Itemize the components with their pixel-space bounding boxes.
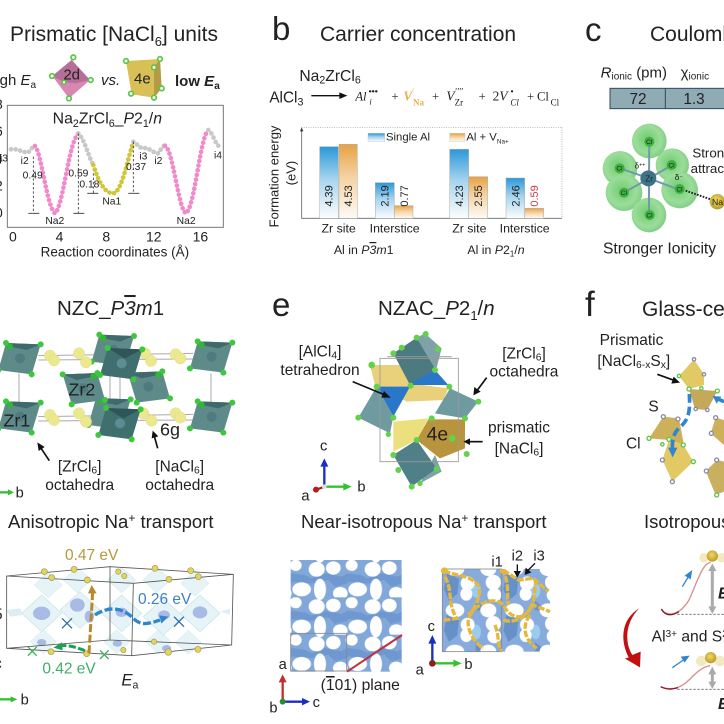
label: AlCl4 tetrahedron: tetrahedron: [280, 362, 360, 379]
defect equation: V: [446, 89, 456, 104]
defect equation: Na: [299, 68, 319, 85]
table: ionic radius and electronegativity: 72: [629, 91, 647, 108]
defect equation: 6: [355, 75, 361, 87]
label: prismatic NaCl6: prismatic: [488, 420, 550, 437]
arrow: green path: [53, 642, 85, 651]
defect equation: •: [511, 87, 514, 96]
defect equation: ′′′′: [455, 87, 464, 97]
bar chart: formation energy: Al in P3m1: [334, 243, 394, 257]
molecule: ZrCl6 octahedron with Na: Cl: [668, 162, 675, 169]
label: prismatic NaCl6-xSx: 6-x: [636, 360, 651, 371]
title: anisotropic transport: Anisotropic Na: [8, 511, 128, 532]
title: near-isotropic transport: Near-isotropous Na: [301, 511, 461, 532]
chart: energy profile: i2: [154, 156, 163, 167]
caption: stronger ionicity: Stronger Ionicity: [603, 241, 716, 258]
label: AlCl4 tetrahedron: [AlCl: [299, 344, 331, 361]
chart title: Na: [53, 111, 73, 128]
labels: Zr sites: Zr2: [68, 380, 95, 400]
arrow: blue migration path: [672, 394, 724, 450]
labels: S and Cl: Cl: [626, 436, 641, 453]
legend: [368, 132, 509, 145]
label: NaCl6 octahedra: ]: [200, 459, 204, 476]
panel f: glass-ceramic: [585, 285, 724, 497]
molecule: ZrCl6 octahedron with Na: ++: [639, 163, 645, 169]
defect equation: 3: [297, 96, 303, 108]
bar chart: formation energy: 4.23: [454, 185, 466, 207]
label: versus: vs.: [101, 72, 120, 89]
axes: c b a: b: [464, 657, 472, 673]
axes: c b a: c: [428, 619, 435, 635]
axes: a c b: b: [269, 700, 277, 716]
chart: energy profile: 0.18: [79, 179, 100, 190]
title: prismatic units: Prismatic [NaCl: [10, 23, 155, 46]
labels: i1 i2 i3 with arrows: i2: [512, 548, 523, 564]
molecule: ZrCl6 octahedron with Na: −: [679, 174, 683, 180]
chart title: ZrCl: [79, 111, 109, 128]
chart: energy profile: 0.37: [126, 162, 146, 173]
panel: anisotropic transport: [0, 511, 233, 708]
axes: a c b: [269, 657, 320, 716]
label: plane: (101) plane: [321, 677, 400, 694]
chart: energy profile: i4: [214, 150, 222, 161]
arrowheads: [668, 396, 721, 457]
chart title: 1: [143, 118, 149, 130]
title: NZAC P21/n: 1: [470, 308, 478, 323]
bar chart: formation energy: 1: [510, 249, 515, 258]
defect equation: +: [479, 90, 486, 104]
defect equation: ZrCl: [325, 68, 355, 85]
isosurface: [7, 567, 230, 654]
title: carrier concentration: Carrier concentration: [320, 23, 516, 46]
vacancy marks: [28, 617, 184, 659]
table: ionic radius and electronegativity: ionic: [611, 71, 632, 82]
icon: 2d octahedron: 2d: [63, 66, 80, 83]
panel letter b: b: [272, 10, 290, 47]
legend: Al + V: [466, 132, 497, 144]
arrow: blue path: [95, 609, 168, 624]
bar chart: formation energy: 2.46: [510, 185, 522, 207]
label: prismatic NaCl6: [NaCl: [495, 440, 533, 457]
axis: b: b: [16, 486, 24, 502]
defect equation: +: [432, 90, 439, 104]
arrow: to prism: [657, 374, 680, 384]
label: prismatic NaCl6-xSx: x: [661, 360, 667, 371]
title: NZAC P21/n: NZAC_P2: [378, 297, 470, 320]
title: anisotropic transport: +: [128, 511, 135, 525]
chart: energy profile: i3: [0, 153, 8, 164]
labels: i1 i2 i3 with arrows: [491, 548, 545, 578]
defect equation: i: [369, 97, 372, 107]
bar chart: formation energy: 2.19: [380, 185, 392, 207]
chart: energy profile: Na2: [45, 216, 65, 227]
defect equation: AlCl: [269, 90, 297, 107]
axis: b: b: [21, 692, 29, 708]
icon: 2d octahedron: [50, 55, 93, 101]
axes: a c b: a: [279, 657, 288, 673]
defect equation: Na: [413, 97, 424, 107]
structure: prismatic units: [647, 358, 724, 497]
map: charge density in plane: [291, 560, 402, 672]
chart: energy profile: [0, 96, 223, 260]
label: Al and S doping: Al: [652, 629, 666, 646]
label: AlCl4 tetrahedron: ]: [337, 344, 341, 361]
labels: Zr sites: Zr1: [3, 410, 30, 430]
chart title: P2: [123, 111, 143, 128]
map: Na migration network: [441, 567, 550, 652]
panel letter e: e: [272, 286, 290, 323]
title: NZAC P21/n: /: [478, 297, 484, 320]
chart: energy profile: 0.59: [68, 169, 89, 180]
label: Al and S doping: and S: [677, 629, 722, 646]
chart: energy profile: Na2: [177, 216, 196, 227]
molecule: ZrCl6 octahedron with Na: Cl: [646, 139, 653, 146]
bar chart: formation energy: 0.77: [399, 185, 411, 207]
label: low activation energy: low E: [175, 73, 214, 90]
labels: S and Cl: S: [648, 399, 659, 416]
arrow: brown path: [88, 585, 97, 653]
y axis label: Formation energy: [267, 125, 282, 227]
table: ionic radius and electronegativity: 1.3: [683, 91, 705, 108]
label: AlCl4 tetrahedron: 4: [331, 351, 337, 362]
crystal structure: NZAC: [355, 331, 481, 490]
molecule: ZrCl6 octahedron with Na: [603, 124, 724, 232]
label: prismatic NaCl6: ]: [539, 440, 543, 457]
label: Al and S doping: 3+: [666, 629, 677, 640]
label: prismatic NaCl6-xSx: Prismatic: [600, 332, 663, 349]
labels: i1 i2 i3 with arrows: i1: [491, 554, 503, 570]
molecule: ZrCl6 octahedron with Na: Zr: [645, 175, 653, 184]
defect equation: V: [403, 89, 413, 104]
axis: b: [0, 486, 24, 502]
arrow: to tetrahedron: [353, 382, 391, 398]
axes: a b c: a: [301, 489, 310, 505]
chart: energy profile: 16: [193, 229, 208, 245]
panel: isotropous energy barrier: [623, 511, 724, 713]
bar chart: formation energy: /: [514, 243, 518, 257]
label: prismatic NaCl6-xSx: ]: [666, 353, 670, 370]
title: anisotropic transport: transport: [135, 511, 213, 532]
panel c: Coulombic interaction: [585, 11, 724, 258]
table: ionic radius and electronegativity: [601, 64, 724, 109]
label: ZrCl6 octahedra: octahedra: [45, 477, 114, 494]
axes: c b a: [416, 619, 472, 678]
molecule: ZrCl6 octahedron with Na: Cl: [621, 190, 627, 197]
bar chart: formation energy: 2.55: [473, 185, 485, 207]
title: near-isotropic transport: +: [461, 511, 468, 525]
title: prismatic units: 6: [155, 34, 162, 49]
chart title: _: [114, 111, 124, 128]
energy labels: 0.42 eV: [42, 660, 96, 677]
defect equation: +: [527, 90, 534, 104]
diagram: low barrier: [661, 652, 724, 713]
axes: c b a: a: [416, 662, 425, 678]
title: prismatic units: ] units: [162, 23, 218, 46]
title: NZAC P21/n: n: [483, 297, 495, 320]
panel b: carrier concentration: [267, 10, 562, 258]
panel a: prismatic NaCl6 units: [0, 23, 223, 260]
axis: b: [0, 692, 29, 708]
chart: energy profile: Na1: [102, 196, 122, 207]
molecule: ZrCl6 octahedron with Na: δ: [635, 162, 639, 171]
icon: 4e prism: [124, 57, 164, 100]
defect equation: 2: [319, 75, 325, 87]
bar chart: formation energy: Al in P2: [467, 243, 510, 257]
axes: a c b: c: [313, 695, 320, 711]
defect equation: +: [391, 90, 399, 104]
labels: Zr sites: 6g: [160, 420, 180, 440]
energy labels: a: [132, 679, 138, 691]
bar chart: formation energy: [267, 125, 562, 258]
crystal structure: NZC octahedra: [0, 332, 235, 442]
title: near-isotropic transport: transport: [468, 511, 547, 532]
chart: energy profile: 0: [9, 229, 17, 245]
defect equation: Cl: [537, 90, 549, 104]
table: ionic radius and electronegativity: R: [601, 64, 612, 81]
defect equation: Cl: [551, 97, 560, 107]
energy labels: [0, 547, 192, 691]
panel letter f: f: [585, 285, 595, 324]
title: NZC P-3m1: NZC_P3m1: [57, 297, 164, 320]
label: ZrCl6 octahedra: 6: [91, 466, 97, 477]
chart title: 6: [109, 118, 115, 130]
diagram: high barrier: [661, 550, 724, 615]
labels: Zr sites: [3, 380, 180, 440]
arrow: to NaCl6: [152, 431, 158, 448]
bar chart: formation energy: 0.59: [529, 185, 541, 207]
defect equation: Cl: [510, 97, 519, 107]
legend: Na+: [497, 138, 509, 145]
label: NaCl6 octahedra: [NaCl: [155, 459, 194, 476]
axes: a b c: c: [320, 438, 327, 454]
crystal structure: NZAC: 4e: [427, 425, 448, 446]
unit cell box: [7, 567, 233, 656]
chart title: n: [153, 111, 162, 128]
arrow: to prism: [463, 438, 483, 445]
table: ionic radius and electronegativity: ionic: [689, 71, 709, 82]
label: ZrCl6 octahedra: ]: [97, 459, 101, 476]
sodium sites: [41, 565, 201, 657]
chart: energy profile: 12: [146, 229, 162, 245]
bar chart: formation energy: Zr site: [322, 222, 356, 236]
defect equation: ′: [412, 88, 415, 98]
bar chart: formation energy: Interstice: [370, 222, 420, 236]
label: ZrCl6 octahedra: octahedra: [490, 364, 559, 381]
label: high activation energy: a: [31, 80, 37, 91]
table: ionic radius and electronegativity: (pm): [632, 64, 667, 81]
defect equation: •••: [369, 86, 378, 96]
energy labels: E: [121, 671, 132, 690]
chart: energy profile: 8: [102, 229, 110, 245]
defect equation: Zr: [455, 97, 463, 107]
label: prismatic NaCl6-xSx: [NaCl: [597, 353, 636, 370]
chart: energy profile: i2: [21, 156, 29, 167]
chart title: /: [149, 111, 154, 128]
panel: near-isotropic transport: [269, 511, 550, 716]
labels: S and Cl: [626, 399, 659, 453]
legend: Single Al: [386, 132, 430, 144]
label: ZrCl6 octahedra: [ZrCl: [58, 459, 91, 476]
label: low activation energy: a: [214, 81, 220, 92]
panel e: NZAC structure: [272, 286, 559, 505]
chart: energy profile: Reaction coordinates (Å): [41, 245, 189, 260]
panel letter c: c: [585, 11, 602, 48]
chart: energy profile: i3: [139, 151, 148, 162]
label: prismatic NaCl6-xSx: S: [650, 353, 661, 370]
label: ZrCl6 octahedra: [ZrCl: [502, 345, 536, 362]
bar chart: formation energy: n: [518, 243, 525, 257]
bar chart: formation energy: (eV): [283, 161, 298, 185]
energy labels: 0.26 eV: [138, 591, 192, 608]
axes: a b c: [301, 438, 365, 505]
icon: 4e prism: 4e: [134, 70, 151, 87]
labels: i1 i2 i3 with arrows: i3: [533, 548, 545, 564]
defect equation: Al: [354, 90, 367, 104]
label: prismatic NaCl6: 6: [533, 447, 539, 458]
bar chart: formation energy: Interstice: [500, 222, 550, 236]
molecule: ZrCl6 octahedron with Na: Cl: [616, 166, 623, 173]
defect equation: [269, 68, 560, 108]
defect equation: 2V: [493, 89, 509, 104]
molecule: ZrCl6 octahedron with Na: δ: [675, 172, 679, 182]
molecule: ZrCl6 octahedron with Na: Cl: [676, 186, 683, 193]
arrow: to ZrCl6: [473, 378, 487, 395]
chart title: 2: [73, 118, 79, 130]
chart: energy profile: 0.49: [23, 171, 43, 182]
label: ZrCl6 octahedra: ]: [541, 345, 546, 362]
panel d: NZC structure: [0, 297, 235, 502]
table: ionic radius and electronegativity: χ: [681, 64, 689, 81]
arrow: to ZrCl6: [37, 442, 49, 461]
energy labels: 0.47 eV: [65, 547, 119, 564]
bar chart: formation energy: 4.53: [343, 185, 355, 207]
axes: a b c: b: [357, 480, 365, 496]
bar chart: formation energy: 4.39: [324, 185, 336, 207]
bar chart: formation energy: Zr site: [452, 222, 487, 236]
chart: energy profile: 4: [56, 229, 64, 245]
label: NaCl6 octahedra: octahedra: [145, 477, 214, 494]
label: NaCl6 octahedra: 6: [194, 466, 200, 477]
molecule: ZrCl6 octahedron with Na: Cl: [646, 212, 653, 219]
arrow: red curved: [623, 608, 641, 667]
molecule: ZrCl6 octahedron with Na: Na: [712, 197, 723, 207]
label: ZrCl6 octahedra: 6: [536, 352, 542, 363]
